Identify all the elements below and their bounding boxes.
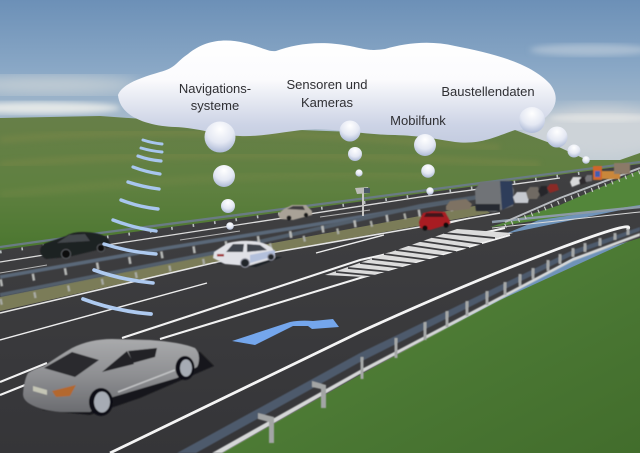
label: Mobilfunk: Mobilfunk bbox=[390, 113, 446, 128]
car: red hatchback bbox=[419, 211, 450, 231]
tail light bbox=[52, 385, 76, 397]
front wheel bbox=[176, 356, 194, 380]
queued car: white bbox=[513, 192, 529, 203]
bubbles: Mobilfunk bbox=[414, 134, 436, 195]
guardrails: median bbox=[0, 195, 490, 302]
median grass strip bbox=[0, 205, 490, 311]
car: black saloon bbox=[40, 232, 110, 259]
car: white saloon bbox=[213, 241, 282, 267]
guardrail: lower right bbox=[177, 227, 640, 453]
road marking: right edge line bbox=[110, 227, 629, 453]
guardrail: upper bbox=[0, 162, 640, 252]
queued car: beige bbox=[446, 199, 472, 211]
label: Navigationssysteme: systeme bbox=[191, 98, 239, 113]
label: Sensoren und Kameras: Sensoren und bbox=[287, 77, 367, 92]
side windows bbox=[102, 348, 157, 372]
queued car: red bbox=[547, 184, 559, 193]
lower right grass bbox=[222, 236, 640, 453]
hatched area bbox=[325, 229, 513, 277]
car: distant silver bbox=[278, 205, 312, 220]
grass hill bbox=[0, 116, 640, 262]
road marking: upper dashes bbox=[0, 210, 370, 273]
road marking: median edge line bbox=[0, 213, 500, 313]
sky bbox=[0, 0, 640, 175]
queued car: dark far bbox=[579, 177, 587, 185]
label: Navigationssysteme: Navigations- bbox=[179, 81, 251, 96]
rear window bbox=[44, 352, 99, 377]
signal waves bbox=[83, 140, 162, 314]
arrow: lane change bbox=[232, 319, 339, 345]
camera mast bbox=[355, 187, 370, 216]
label: Sensoren und Kameras: Kameras bbox=[301, 95, 354, 110]
rear wheel bbox=[89, 388, 113, 416]
roadworks trailer bbox=[593, 163, 630, 180]
motorway surface bbox=[0, 164, 640, 453]
queued car: grey far bbox=[585, 175, 592, 182]
bubbles: Baustellendaten bbox=[519, 107, 590, 164]
queued car: grey bbox=[526, 187, 540, 199]
bubbles: Sensoren und Kameras bbox=[340, 120, 363, 177]
bubbles: Navigationssysteme bbox=[204, 122, 236, 230]
label: Baustellendaten: Baustellendaten bbox=[441, 84, 535, 99]
road marking: double lines bbox=[0, 228, 510, 395]
queued car: white far bbox=[570, 177, 582, 187]
road marking: lane dashes bbox=[0, 218, 470, 340]
door highlight bbox=[118, 370, 175, 392]
queued car: dark bbox=[538, 186, 548, 197]
road marking: upper edge line bbox=[0, 178, 560, 262]
car: silver coupe foreground bbox=[23, 339, 214, 416]
traffic queue bbox=[446, 163, 630, 212]
data cloud bbox=[118, 41, 556, 143]
number plate bbox=[33, 386, 47, 395]
right island grass and exit rail bbox=[490, 168, 640, 228]
truck bbox=[475, 180, 514, 212]
